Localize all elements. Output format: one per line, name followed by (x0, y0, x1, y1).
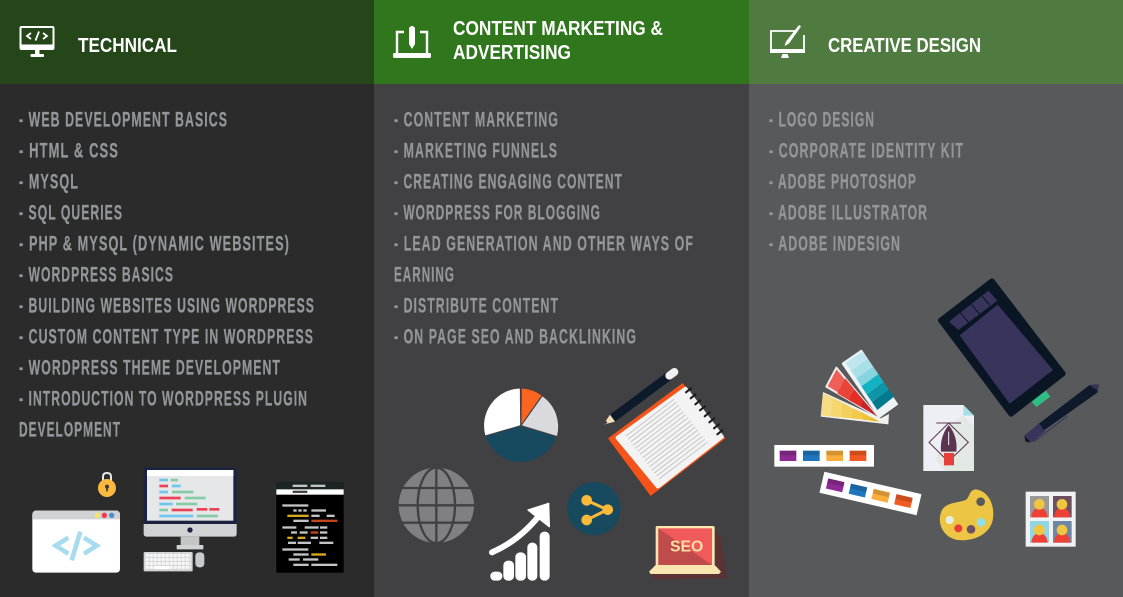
text block: creative design topics: - ADOBE INDESIGN (769, 232, 901, 255)
icon: share (567, 482, 621, 535)
text block: creative design topics: - ADOBE ILLUSTRATOR (769, 201, 928, 224)
text block: content marketing topics: - MARKETING FUNNELS (394, 139, 558, 162)
icon: browser code window (32, 511, 120, 573)
heading: technical: TECHNICAL (78, 34, 177, 57)
icon: globe (399, 468, 474, 543)
text block: technical topics: - INTRODUCTION TO WORDPRESS PLUGIN (19, 387, 308, 410)
icon: mouse (195, 552, 204, 567)
illustrations: creative design (774, 281, 1099, 547)
text block: technical topics: - WORDPRESS THEME DEVELOPMENT (19, 356, 281, 379)
icon: desktop computer (144, 467, 237, 571)
heading: creative design: CREATIVE DESIGN (828, 34, 981, 57)
illustrations: technical (32, 467, 344, 573)
icon: laptop with pencil (393, 26, 431, 58)
icon: SEO laptop (649, 526, 727, 579)
text block: content marketing topics: - ON PAGE SEO AND BACKLINKING (394, 325, 637, 348)
heading: content marketing and advertising: ADVERTISING (453, 41, 571, 64)
text block: creative design topics: - CORPORATE IDENTITY KIT (769, 139, 964, 162)
text block: creative design topics: - ADOBE PHOTOSHOP (769, 170, 917, 193)
icon: portrait grid (1026, 492, 1076, 547)
text block: content marketing topics: - LEAD GENERATION AND OTHER WAYS OF (394, 232, 694, 255)
panel: creative design background (749, 84, 1123, 597)
icon: SEO laptop: SEO (670, 539, 703, 556)
text block: content marketing topics: EARNING (394, 263, 455, 286)
icon: paint palette (940, 489, 993, 540)
text block: technical topics: - SQL QUERIES (19, 201, 123, 224)
icon: code listing (276, 482, 344, 573)
icon: drawing tablet (941, 281, 1063, 414)
icon: colour swatches (821, 350, 898, 424)
text block: content marketing topics: - DISTRIBUTE CONTENT (394, 294, 559, 317)
icon: padlock (98, 473, 116, 497)
icon: growth bars and arrow (490, 503, 550, 581)
icon: design monitor (770, 25, 805, 58)
panel: content marketing background (374, 84, 749, 597)
heading: content marketing and advertising: CONTENT MARKETING & (453, 17, 663, 40)
text block: creative design topics: - LOGO DESIGN (769, 108, 875, 131)
text block: technical topics: - WEB DEVELOPMENT BASICS (19, 108, 228, 131)
icon: colour strip tilted (819, 472, 921, 515)
icon: keyboard (144, 552, 193, 571)
text block: technical topics: - HTML & CSS (19, 139, 119, 162)
header: creative design (749, 0, 1123, 84)
illustrations: content marketing (399, 372, 727, 581)
text block: content marketing topics: - WORDPRESS FOR BLOGGING (394, 201, 601, 224)
header: content marketing (374, 0, 749, 84)
text block: content marketing topics: - CREATING ENGAGING CONTENT (394, 170, 623, 193)
icon: colour strip straight (774, 445, 874, 467)
text block: technical topics: - CUSTOM CONTENT TYPE IN WORDPRESS (19, 325, 314, 348)
icon: code monitor (20, 26, 54, 57)
text block: technical topics: - BUILDING WEBSITES USING WORDPRESS (19, 294, 315, 317)
text block: creative design topics (769, 108, 964, 255)
icon: pen tool document (923, 405, 974, 471)
text block: technical topics (19, 108, 315, 441)
text block: technical topics: - PHP & MYSQL (DYNAMIC WEBSITES) (19, 232, 290, 255)
text block: content marketing topics (394, 108, 694, 348)
icon: pencil (603, 372, 674, 425)
text block: technical topics: - MYSQL (19, 170, 79, 193)
heading: content marketing and advertising (453, 17, 663, 64)
text block: technical topics: DEVELOPMENT (19, 418, 121, 441)
panel: technical background (0, 84, 374, 597)
text block: content marketing topics: - CONTENT MARKETING (394, 108, 559, 131)
text block: technical topics: - WORDPRESS BASICS (19, 263, 174, 286)
header: technical (0, 0, 374, 84)
icon: notebook (608, 383, 725, 496)
pie chart (484, 388, 559, 462)
icon: stylus (1024, 384, 1099, 443)
